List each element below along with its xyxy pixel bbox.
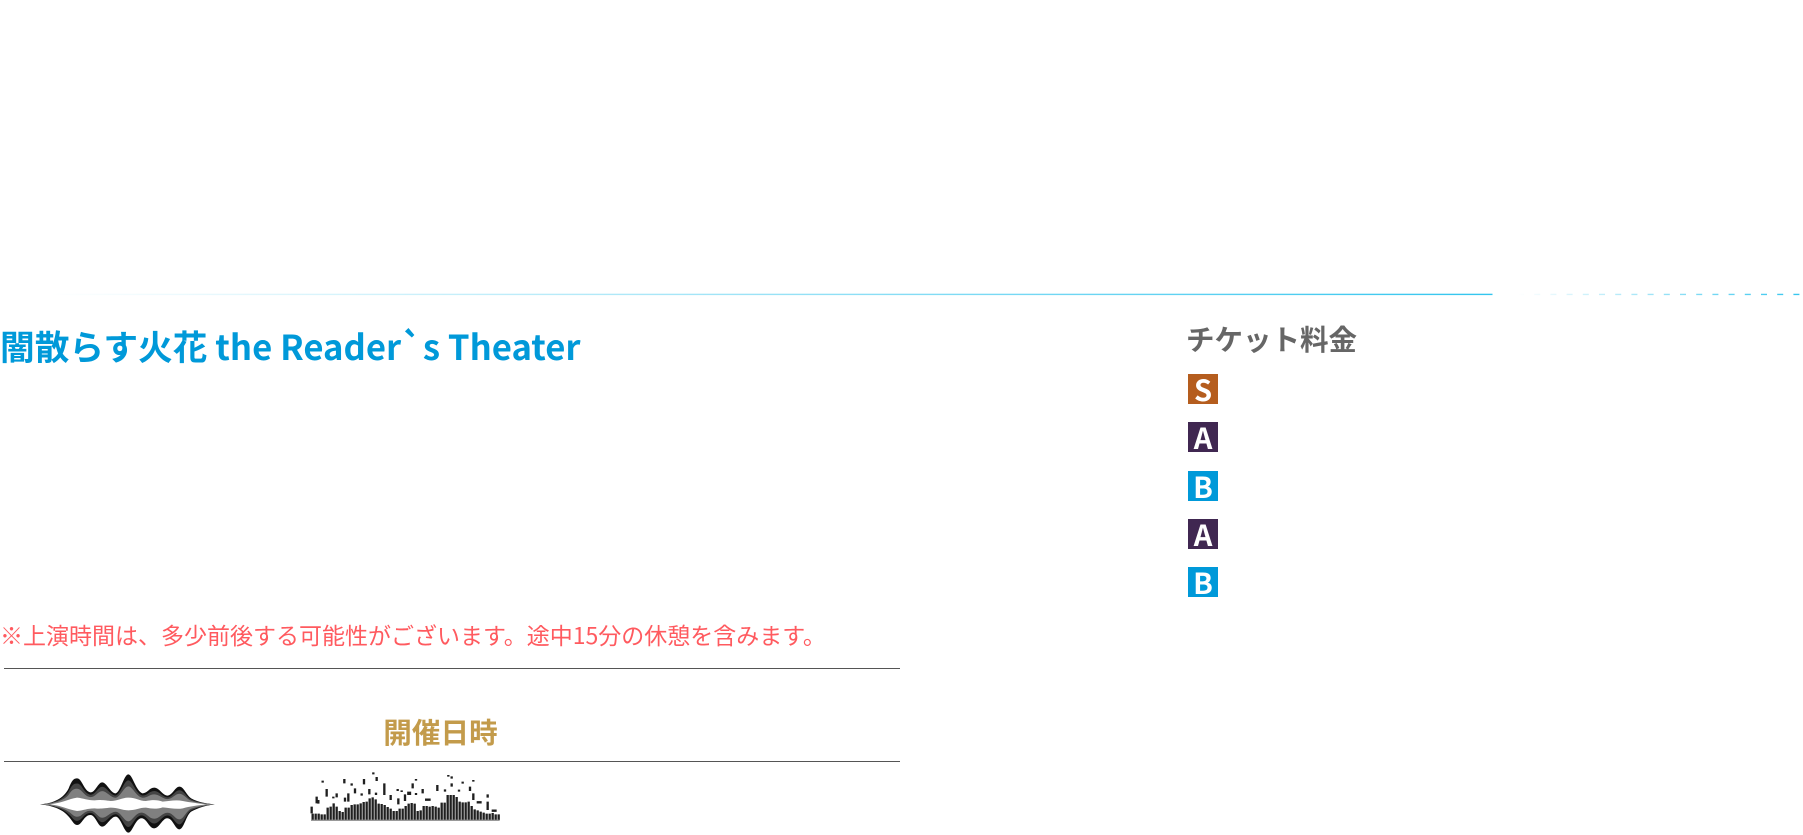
badge: B seat second: [1188, 567, 1218, 597]
badge: S seat: [1188, 374, 1218, 404]
equalizer bars body: [313, 795, 499, 820]
badge: A seat second: [1188, 519, 1218, 549]
icon: equalizer bars: [310, 772, 500, 821]
badge: A seat: [1188, 422, 1218, 452]
note: running time: ※上演時間は、多少前後する可能性がございます。途中15分の休憩を含みます。: [0, 617, 826, 651]
rule below date heading: [4, 760, 900, 762]
heading: event dates: 開催日時: [383, 711, 498, 752]
icon: mirrored sound wave: [40, 774, 214, 833]
badge: A seat second: A: [1194, 513, 1212, 555]
title: 闇散らす火花 the Reader`s Theater: [0, 320, 581, 370]
badge: A seat: A: [1194, 416, 1212, 458]
badge: S seat: S: [1194, 368, 1212, 410]
rule above date heading: [4, 668, 900, 669]
heading: ticket prices: チケット料金: [1186, 318, 1357, 359]
badge: B seat: B: [1193, 465, 1213, 507]
badge: B seat second: B: [1193, 561, 1213, 603]
badge: B seat: [1188, 471, 1218, 501]
floating fragments: [312, 772, 497, 813]
